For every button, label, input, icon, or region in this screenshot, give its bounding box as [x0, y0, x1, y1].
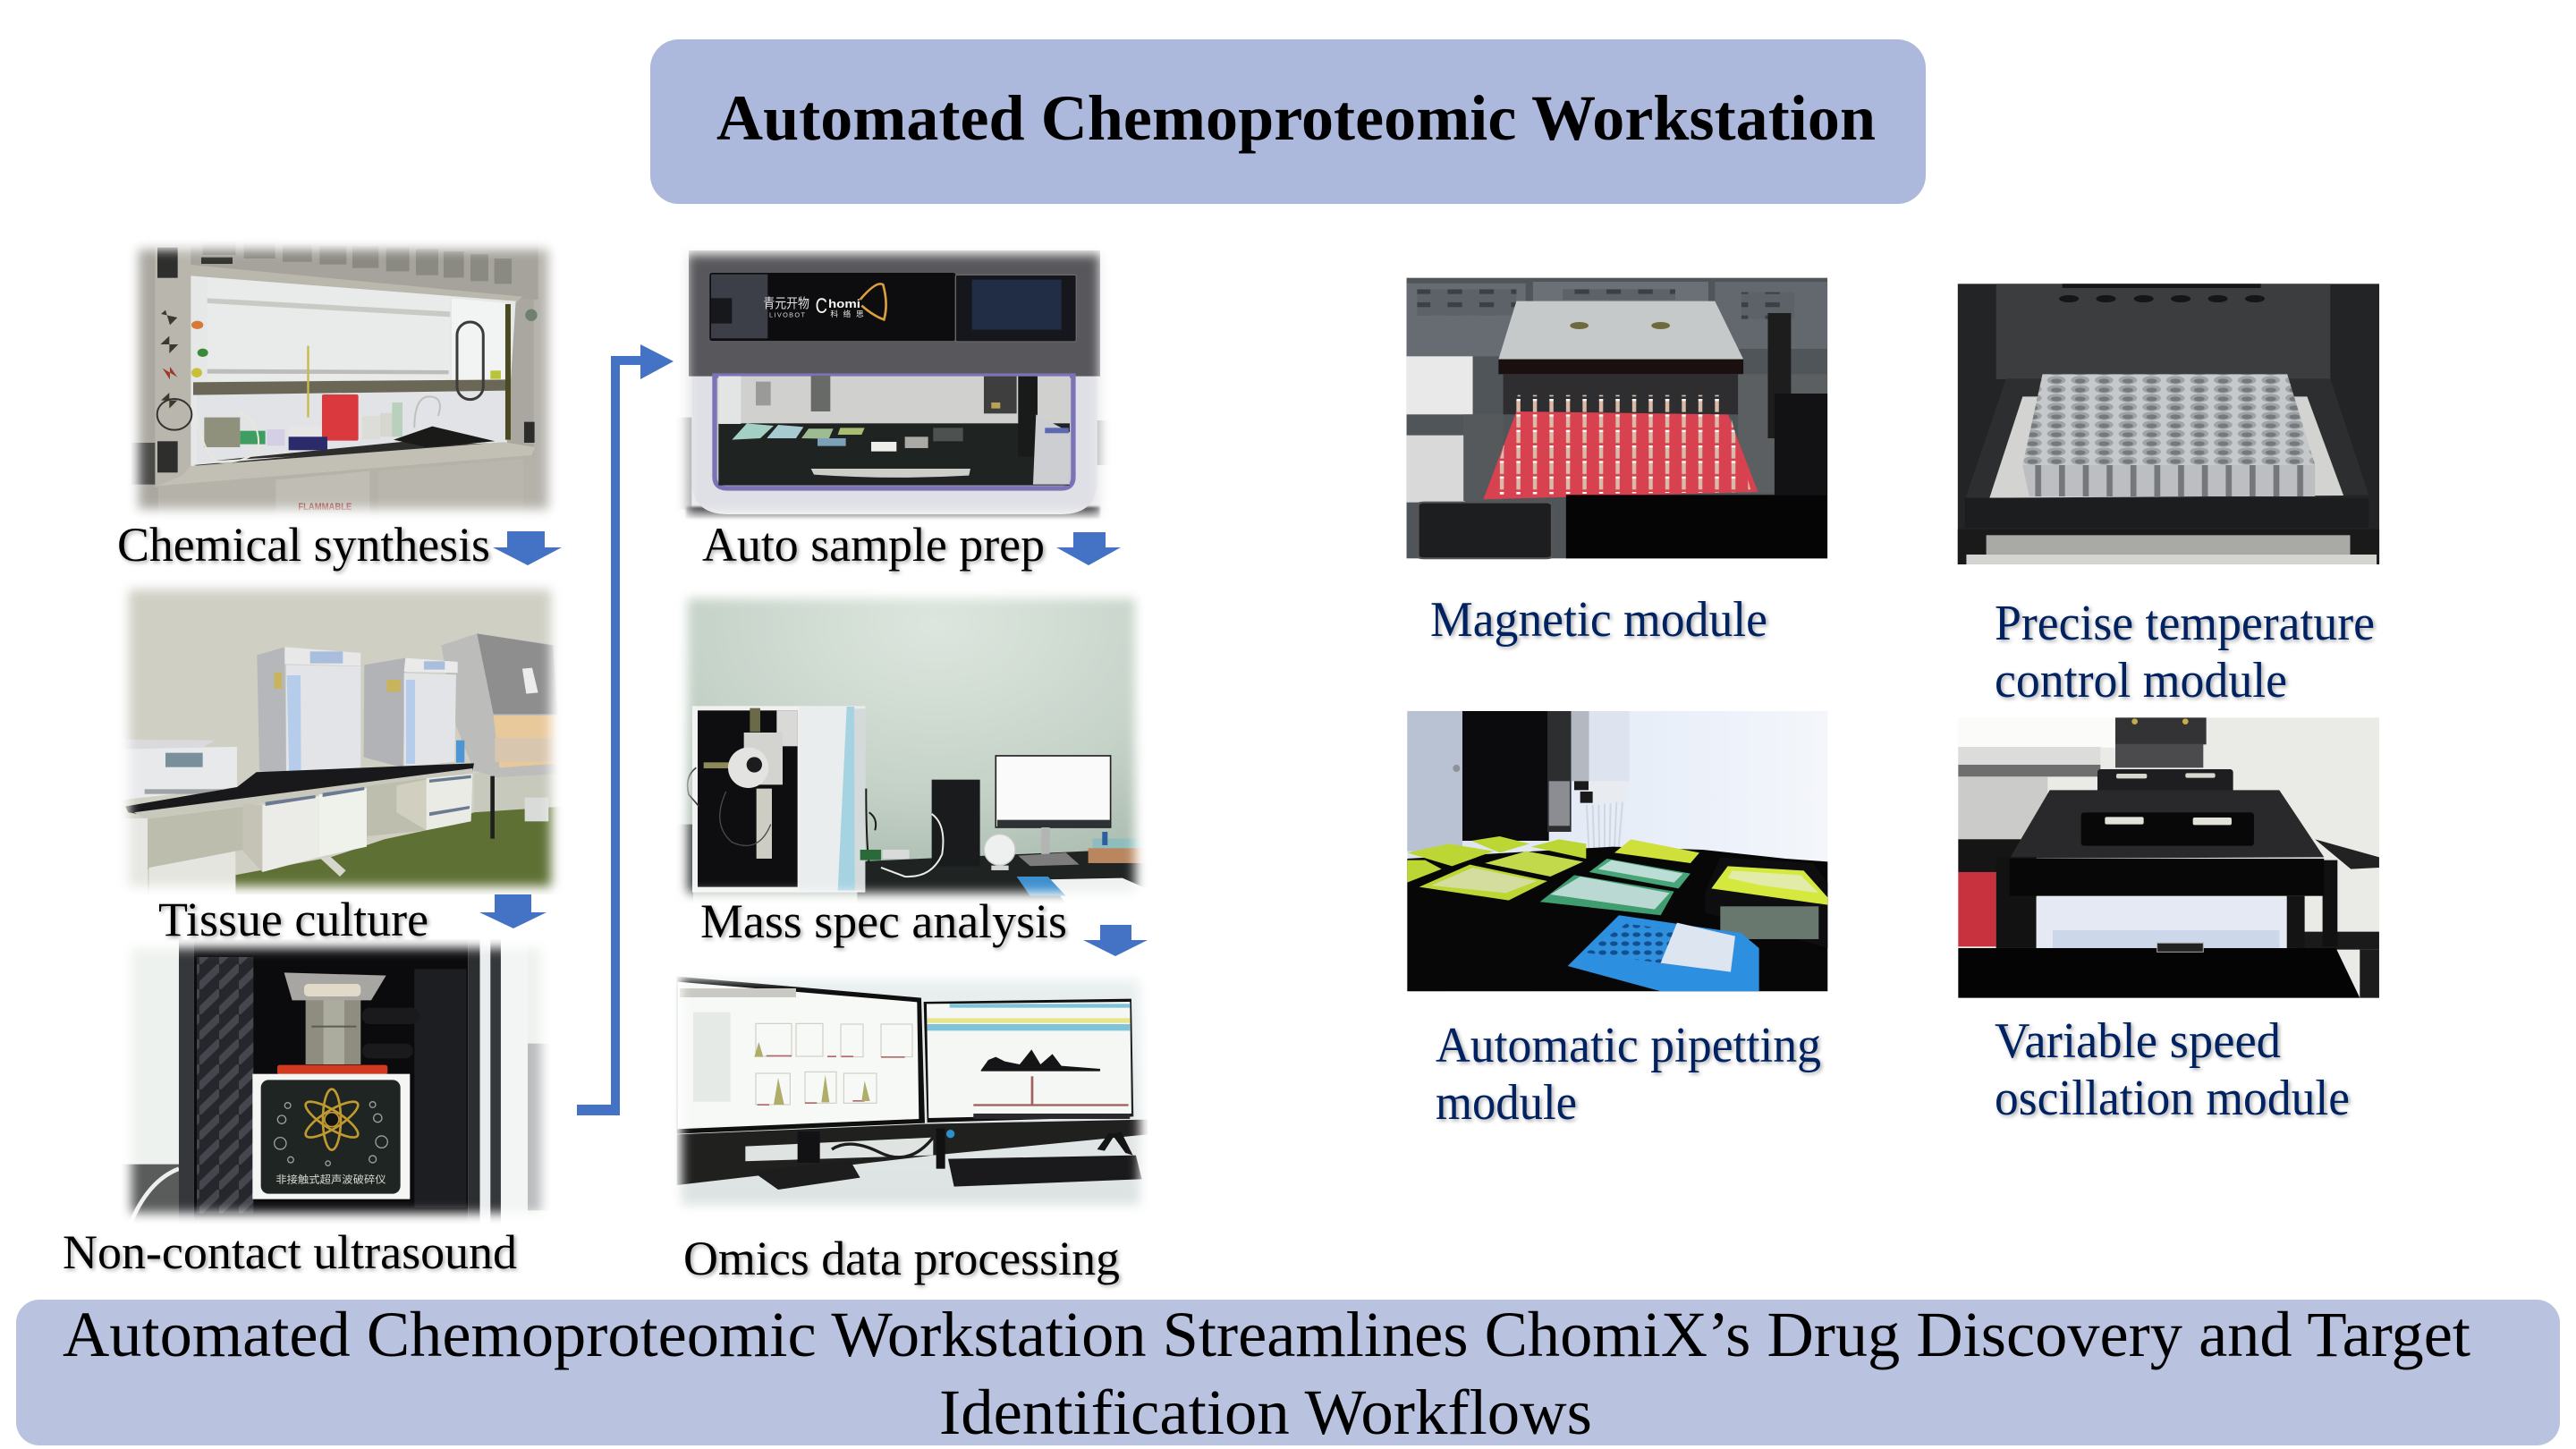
- label: Mass spec analysis: [700, 894, 1067, 948]
- photo: magnetic module: [1407, 278, 1827, 558]
- device caption: 非接触式超声波破碎仪: [275, 1174, 386, 1186]
- step: omics data processing: [671, 970, 1148, 1285]
- module: automatic pipetting: [1407, 711, 1827, 1131]
- label: Omics data processing: [683, 1232, 1120, 1285]
- logo text: LIVOBOT: [769, 311, 806, 319]
- logo text: 青元开物: [763, 296, 809, 311]
- label: Precise temperature: [1995, 596, 2375, 651]
- label line 2: control module: [1995, 653, 2287, 708]
- photo: workstation: [680, 250, 1106, 520]
- label line 2: oscillation module: [1995, 1071, 2350, 1126]
- label line 2: module: [1436, 1075, 1577, 1131]
- photo: ultrasound device: [121, 939, 550, 1225]
- arrow: [493, 531, 562, 565]
- step: tissue culture: [116, 577, 564, 946]
- title: Automated Chemoproteomic Workstation: [716, 82, 1876, 154]
- label: Variable speed: [1995, 1013, 2281, 1069]
- logo text: homi: [828, 298, 860, 310]
- step: mass spec analysis: [675, 586, 1149, 956]
- photo: dual monitors: [671, 970, 1148, 1216]
- banner line 1: Automated Chemoproteomic Workstation Streamlines ChomiX’s Drug Discovery and Target: [63, 1299, 2470, 1370]
- step: auto sample prep: [671, 242, 1121, 572]
- module: variable speed oscillation: [1958, 717, 2379, 1126]
- logo text: [763, 284, 886, 319]
- logo text: 科络思: [830, 309, 864, 318]
- photo: fume hood: FLAMMABLE: [298, 502, 352, 513]
- connector arrow: [577, 344, 674, 1115]
- photo: incubators: [116, 577, 564, 894]
- label: Tissue culture: [158, 893, 428, 946]
- photo: pipetting module: [1407, 711, 1827, 991]
- photo: oscillation module: [1958, 717, 2379, 998]
- title banner: [650, 39, 1926, 204]
- label: Non-contact ultrasound: [63, 1225, 517, 1279]
- photo: fume hood: [116, 237, 564, 523]
- logo text: C: [816, 294, 827, 318]
- label: Auto sample prep: [702, 518, 1045, 572]
- arrow: [479, 894, 547, 928]
- module: precise temperature control: [1958, 284, 2379, 708]
- photo: temperature module: [1958, 284, 2379, 564]
- banner line 2: Identification Workflows: [939, 1377, 1592, 1448]
- label: Magnetic module: [1430, 592, 1767, 648]
- bottom banner: [16, 1299, 2560, 1448]
- arrow: [1083, 925, 1148, 956]
- module: magnetic: [1407, 278, 1827, 648]
- label: Chemical synthesis: [117, 518, 490, 572]
- step: non-contact ultrasound: [63, 939, 550, 1279]
- label: Automatic pipetting: [1436, 1018, 1821, 1073]
- arrow: [1056, 532, 1121, 565]
- photo: mass spectrometer: [675, 586, 1149, 903]
- step: chemical synthesis: [116, 237, 564, 572]
